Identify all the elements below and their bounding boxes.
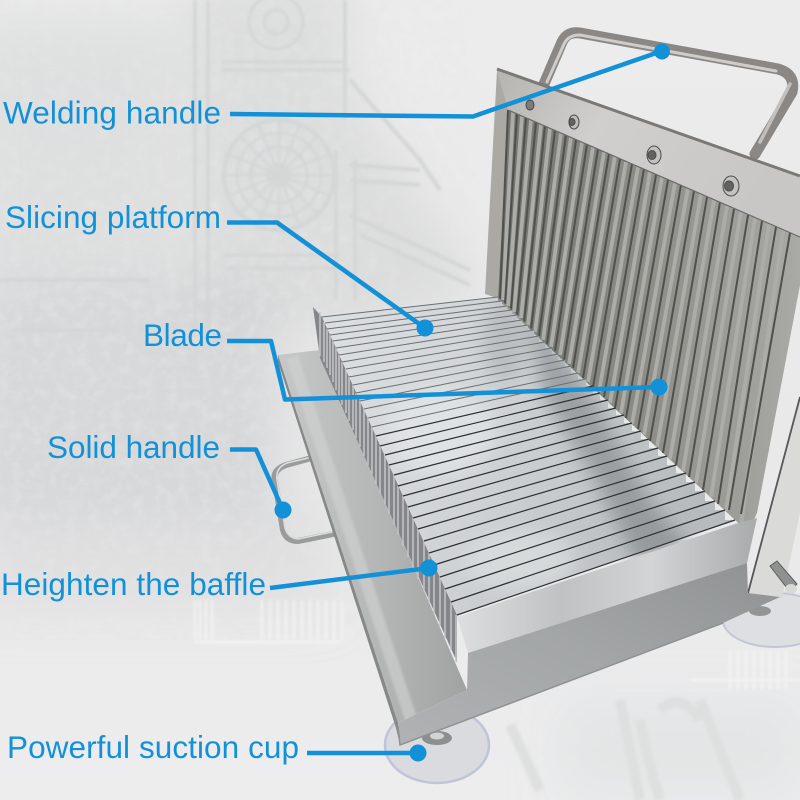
- icon: side bolt: [770, 561, 797, 594]
- callout: welding handle: [3, 44, 670, 130]
- blade pleats: [500, 110, 790, 525]
- blade lines: [322, 297, 586, 427]
- top bar with bolts: [497, 69, 800, 237]
- callout: blade: Blade: [143, 317, 222, 353]
- icon: bolts: [526, 100, 739, 196]
- callout: heighten the baffle: Heighten the baffle: [1, 566, 266, 602]
- callout: blade: [143, 317, 668, 400]
- back blade wall: [485, 70, 800, 532]
- callout: heighten the baffle: [1, 560, 438, 602]
- left frame strip: [485, 70, 510, 300]
- front body face: [398, 563, 780, 745]
- icon: front suction cup: [385, 707, 489, 783]
- solid handle tube: [274, 458, 333, 541]
- welding handle tube: [544, 33, 793, 154]
- baffle: [278, 350, 469, 745]
- icon: right suction cup: [723, 593, 800, 647]
- callout: slicing platform: Slicing platform: [5, 199, 221, 235]
- callout: slicing platform: [5, 199, 434, 336]
- callout: welding handle: Welding handle: [3, 94, 221, 130]
- callout: powerful suction cup: Powerful suction cup: [7, 729, 299, 765]
- right side plate: [748, 397, 800, 598]
- left blade comb: [313, 307, 457, 662]
- callout: solid handle: Solid handle: [47, 429, 220, 465]
- callout: powerful suction cup: [7, 729, 426, 765]
- slicing platform slats: [322, 297, 735, 615]
- callout: solid handle: [47, 429, 292, 518]
- front top strip: [457, 518, 757, 653]
